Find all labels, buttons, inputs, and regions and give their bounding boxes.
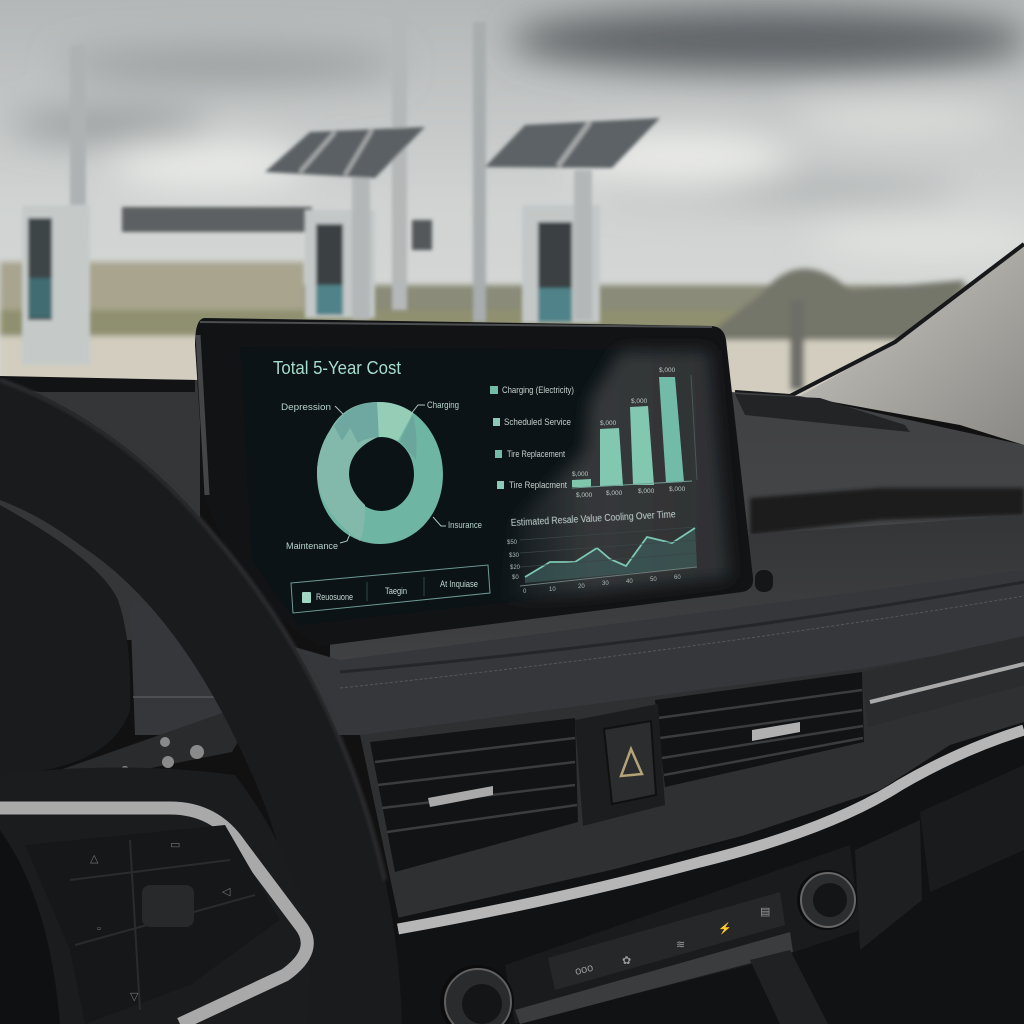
right air vent (655, 672, 864, 787)
line chart: estimated resale value: 20 (578, 584, 585, 590)
bezel left highlight (198, 335, 207, 495)
climate control panel: ⚡ (718, 922, 732, 935)
hazard triangle (621, 749, 642, 776)
background: cloudy sky (0, 0, 1024, 400)
climate control panel: ≋ (676, 939, 685, 951)
donut labels: Charging (427, 400, 459, 411)
vent tab (752, 722, 800, 741)
legend list: Charging (Electricity) (502, 385, 574, 396)
screen bezel (195, 318, 753, 646)
right trim strip with chrome line (862, 636, 1024, 727)
bezel top highlight (200, 322, 712, 327)
donut chart (317, 402, 443, 544)
bar chart (572, 367, 697, 499)
stitched leather strip (130, 570, 1024, 735)
line chart: estimated resale value: 10 (549, 587, 556, 593)
background: blurred ground and road (0, 262, 1024, 398)
line chart: estimated resale value: 50 (650, 577, 657, 583)
bottom table: Reuosuone (316, 592, 353, 602)
wiper stalk (60, 712, 242, 780)
climate control panel: ✿ (622, 955, 631, 967)
vent tab (428, 786, 493, 807)
bar chart: $,000 (659, 367, 676, 374)
climate control panel (505, 845, 860, 1024)
pillar dark seal (735, 244, 1024, 396)
line chart: estimated resale value (507, 509, 697, 595)
climate knob left (440, 965, 514, 1024)
title: Total 5-Year Cost (273, 358, 401, 378)
steering wheel spoke (0, 768, 310, 1024)
steering wheel spoke: ▽ (130, 991, 139, 1003)
line chart: estimated resale value: $50 (507, 540, 518, 546)
steering wheel rim (0, 378, 402, 1024)
spoke buttons (25, 825, 280, 1024)
steering wheel spoke: ▭ (170, 839, 180, 851)
donut labels: Insurance (448, 520, 482, 531)
left air vent (370, 718, 578, 872)
glass reflection (500, 350, 730, 602)
bottom table: Taegin (385, 586, 407, 596)
climate control panel: ▤ (760, 906, 770, 918)
bar chart: $,000 (572, 471, 589, 478)
line chart: estimated resale value: $30 (509, 553, 520, 559)
bar chart: $,000 (638, 488, 655, 495)
bar chart: $,000 (631, 398, 648, 405)
bar chart: $,000 (606, 490, 623, 497)
line chart: estimated resale value: $20 (510, 565, 521, 571)
chrome dash trim (397, 722, 1024, 1024)
steering wheel spoke: ▫ (97, 923, 101, 935)
line chart: estimated resale value: 30 (602, 581, 609, 587)
line chart: estimated resale value: 40 (626, 579, 633, 585)
bar chart: $,000 (576, 492, 593, 499)
lower dash fascia (360, 640, 1024, 925)
line chart: estimated resale value: 60 (674, 575, 681, 581)
background: charging stations with solar canopies (22, 0, 660, 365)
legend list: Tire Replacement (507, 449, 565, 460)
line chart: estimated resale value: Estimated Resale Value Cooling Over Time (511, 509, 676, 529)
legend list: Tire Replacment (509, 480, 567, 491)
donut labels: Maintenance (286, 541, 338, 552)
steering wheel spoke: ◁ (222, 886, 231, 898)
climate knob right (797, 870, 857, 930)
climate control panel: ooo (574, 962, 595, 978)
legend list: Scheduled Service (504, 417, 571, 428)
instrument binnacle (0, 505, 130, 775)
display surface (240, 347, 730, 625)
lower console panel (855, 820, 922, 950)
steering wheel spoke: △ (90, 853, 99, 865)
legend list (490, 385, 574, 491)
bar chart: $,000 (669, 486, 686, 493)
donut labels (281, 400, 482, 552)
right windshield pillar (800, 246, 1024, 445)
dashboard top (0, 376, 1024, 700)
bar chart: $,000 (600, 420, 617, 427)
donut labels: Depression (281, 402, 331, 413)
bottom table (291, 565, 490, 613)
line chart: estimated resale value: 0 (523, 589, 527, 595)
hazard button (575, 704, 665, 826)
line chart: estimated resale value: $0 (512, 575, 519, 581)
bottom table: At Inquiase (440, 579, 478, 589)
centre touchscreen (195, 318, 753, 646)
